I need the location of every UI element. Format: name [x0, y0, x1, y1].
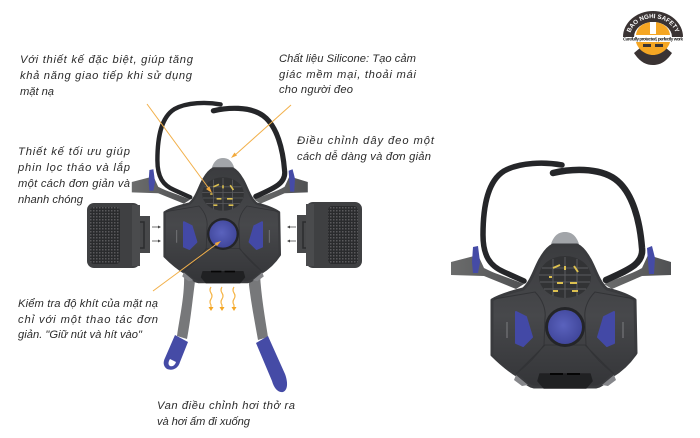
exploded mask diagram	[87, 103, 362, 392]
left bottom strap	[177, 272, 196, 339]
logo: Bao Nghi Safety: Carefully protected, perfectly work	[623, 36, 683, 42]
text: exhalation valve: và hơi ấm đi xuống	[157, 416, 251, 428]
text: strap adjustment: Điều chỉnh dây đeo một	[297, 135, 435, 147]
text: silicone material	[279, 53, 416, 96]
text: exhalation valve	[157, 400, 295, 428]
right bottom strap	[248, 274, 268, 340]
assembly arrows	[152, 226, 296, 242]
assembled mask photo	[451, 163, 671, 388]
logo: Bao Nghi Safety: BAO NGHI SAFETY	[626, 14, 680, 32]
warm air arrows	[208, 287, 236, 311]
text: filter design: phin lọc tháo và lắp	[17, 161, 130, 174]
text: fit check: chỉ với một thao tác đơn	[18, 314, 158, 326]
text: exhalation valve: Van điều chỉnh hơi thở ra	[157, 400, 295, 412]
text: filter design	[17, 146, 130, 206]
text: silicone material: Chất liệu Silicone: Tạo cảm	[279, 53, 416, 65]
right strap clip	[256, 336, 287, 392]
left filter cartridge	[87, 203, 150, 268]
text: speech: khả năng giao tiếp khi sử dụng	[20, 70, 193, 82]
text: strap adjustment: cách dễ dàng và đơn giản	[297, 150, 431, 163]
text: speech: mặt nạ	[20, 86, 54, 98]
orange pointer: silicone	[231, 105, 291, 158]
text: speech	[20, 54, 194, 98]
orange pointer: speech diaphragm	[147, 104, 212, 193]
logo: Bao Nghi Safety	[623, 11, 683, 65]
text: silicone material: cho người đeo	[279, 84, 353, 96]
text: fit check	[18, 298, 158, 341]
mask body with head strap	[132, 103, 308, 283]
text: filter design: nhanh chóng	[18, 194, 84, 206]
text: silicone material: giác mềm mại, thoải mái	[279, 69, 416, 81]
right filter cartridge	[297, 202, 362, 268]
text: speech: Với thiết kế đặc biệt, giúp tăng	[20, 54, 194, 66]
text: fit check: Kiểm tra độ khít của mặt nạ	[18, 298, 158, 310]
orange pointer: fit check button	[153, 241, 221, 291]
text: strap adjustment	[297, 135, 435, 163]
text: filter design: Thiết kế tối ưu giúp	[18, 146, 130, 158]
text: fit check: giản. "Giữ nút và hít vào"	[18, 329, 143, 341]
text: filter design: một cách đơn giản và	[18, 178, 130, 190]
left strap clip	[164, 335, 188, 370]
